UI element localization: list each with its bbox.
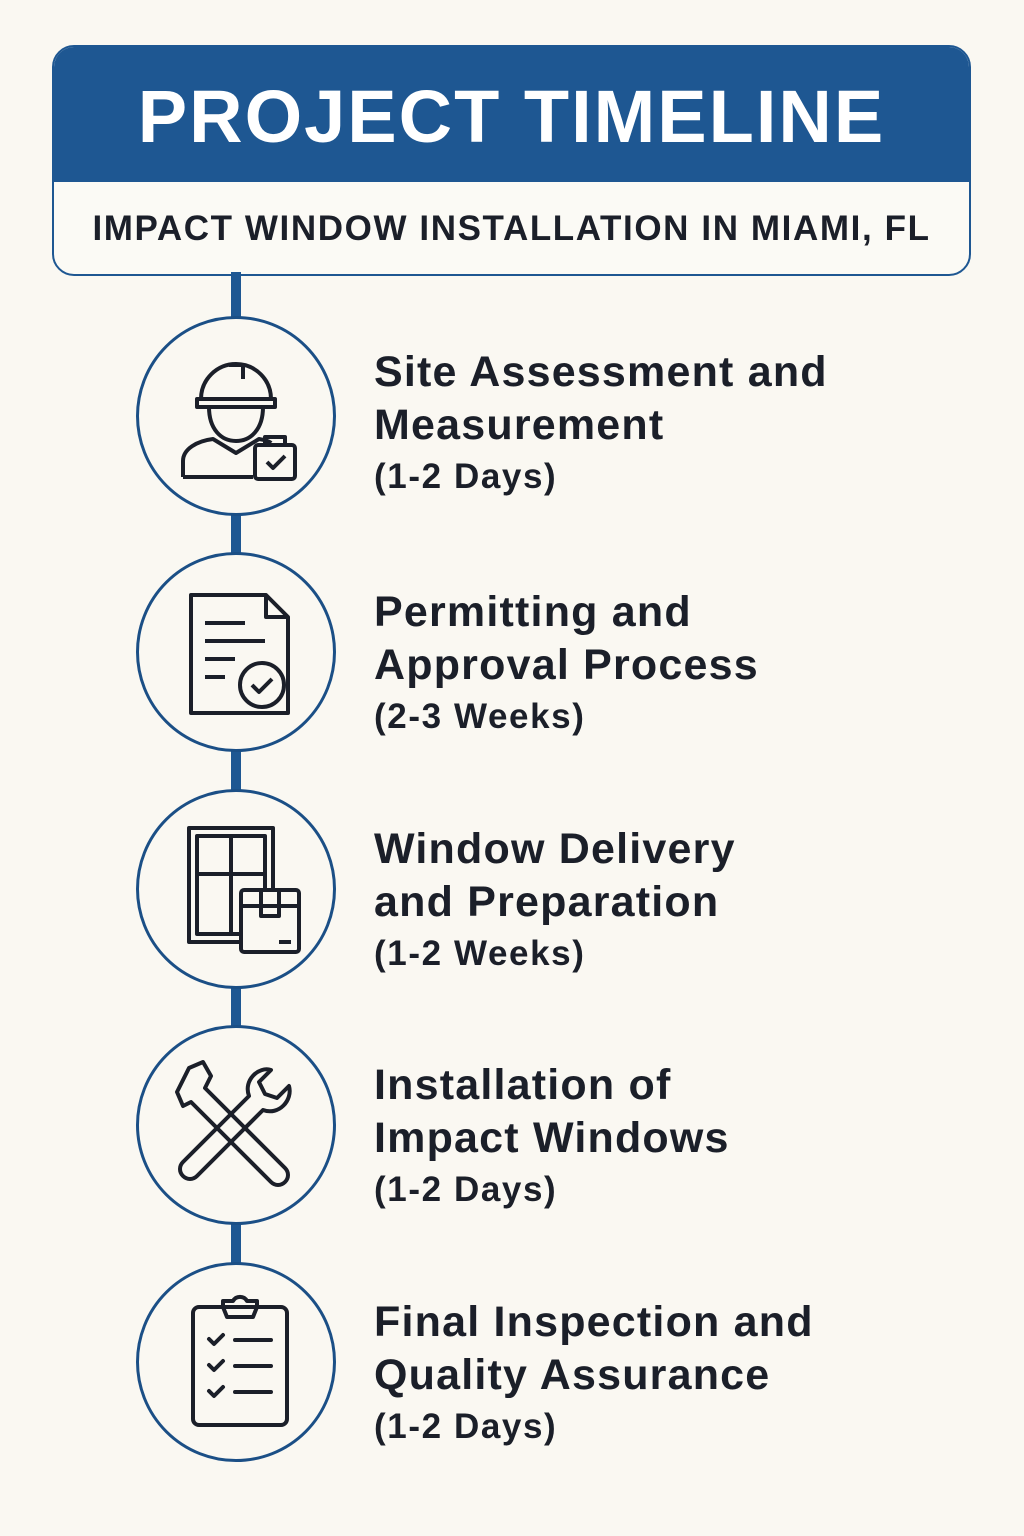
timeline connector xyxy=(231,272,241,1272)
step 1 text: (1-2 Days) xyxy=(374,457,557,496)
step 4 text: Impact Windows xyxy=(374,1114,730,1162)
subtitle: IMPACT WINDOW INSTALLATION IN MIAMI, FL xyxy=(92,209,931,248)
title: PROJECT TIMELINE xyxy=(138,75,885,158)
step 1 icon: worker xyxy=(136,316,336,516)
step 1 text: Site Assessment and xyxy=(374,348,828,396)
step 4 text: Installation of xyxy=(374,1061,672,1109)
step 3 icon: window and box xyxy=(136,789,336,989)
step 2 text: Approval Process xyxy=(374,641,759,689)
step 3 text xyxy=(374,825,736,973)
step 2 icon: document xyxy=(136,552,336,752)
step 5 text xyxy=(374,1298,814,1446)
step 5 icon: checklist xyxy=(136,1262,336,1462)
step 5 text: Quality Assurance xyxy=(374,1351,770,1399)
step 4 icon: tools xyxy=(136,1025,336,1225)
title xyxy=(54,47,969,182)
step 5 text: Final Inspection and xyxy=(374,1298,814,1346)
header xyxy=(52,45,971,276)
step 2 text xyxy=(374,588,759,736)
step 2 text: (2-3 Weeks) xyxy=(374,697,585,736)
step 1 text xyxy=(374,348,828,496)
step 3 text: Window Delivery xyxy=(374,825,736,873)
step 3 text: (1-2 Weeks) xyxy=(374,934,585,973)
step 1 text: Measurement xyxy=(374,401,664,449)
step 5 text: (1-2 Days) xyxy=(374,1407,557,1446)
step 2 text: Permitting and xyxy=(374,588,692,636)
step 4 text xyxy=(374,1061,730,1209)
step 4 text: (1-2 Days) xyxy=(374,1170,557,1209)
step 3 text: and Preparation xyxy=(374,878,719,926)
